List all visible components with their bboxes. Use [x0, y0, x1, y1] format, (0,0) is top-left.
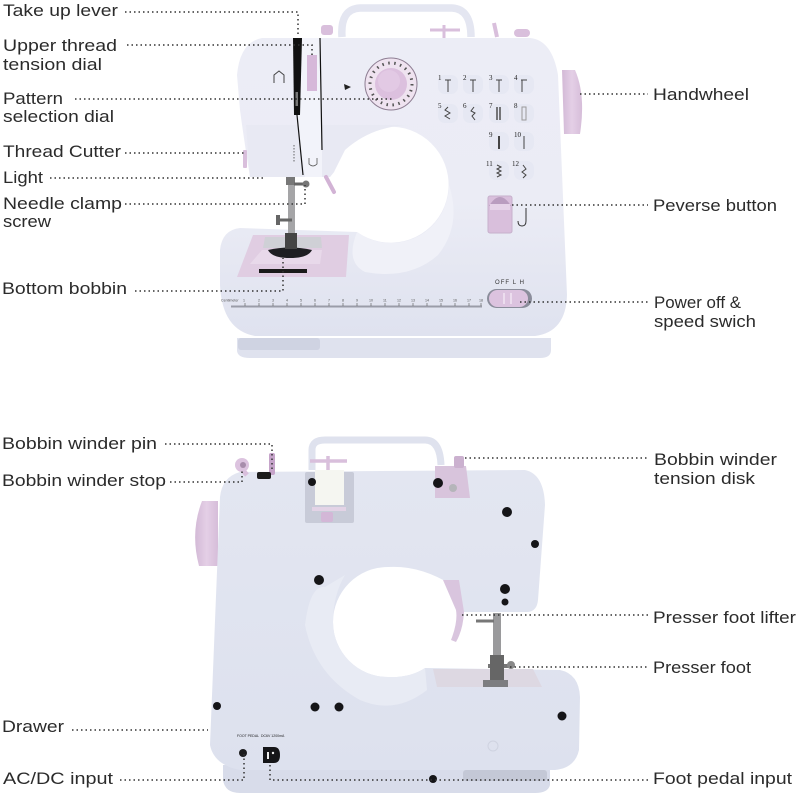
rear body [210, 470, 580, 770]
label: Upper thread tension dial: tension dial [3, 55, 102, 74]
label: Bobbin winder stop: Bobbin winder stop [2, 471, 166, 490]
leader lines [50, 12, 648, 780]
stitch pattern panel [438, 74, 534, 180]
label: Bobbin winder tension disk: tension disk [654, 469, 756, 488]
label: Needle clamp screw: screw [3, 212, 52, 231]
stitch pattern panel: 5 [438, 102, 442, 110]
front view sewing machine [220, 8, 582, 358]
label: Bobbin winder tension disk [654, 450, 777, 488]
ruler: 14 [425, 298, 429, 302]
ruler: 7 [328, 298, 330, 302]
ruler: 5 [300, 298, 302, 302]
stand slot [238, 338, 320, 350]
ruler: Centimeter [221, 298, 239, 302]
rear handle [312, 440, 441, 470]
label: Bobbin winder pin: Bobbin winder pin [2, 434, 157, 453]
machine body [220, 38, 567, 336]
bobbin winder pin [257, 453, 275, 479]
ruler: 9 [356, 298, 358, 302]
power and pedal sockets [237, 734, 498, 763]
label: Power off and speed swich: Power off & [654, 293, 742, 312]
label: Thread Cutter: Thread Cutter [3, 142, 121, 161]
ruler: 13 [411, 298, 415, 302]
ruler: 11 [383, 298, 387, 302]
label: Handwheel: Handwheel [653, 85, 749, 104]
screw holes [213, 478, 566, 783]
presser foot and needle bar [276, 177, 310, 249]
bobbin winder tension disk [435, 456, 470, 498]
label: Presser foot lifter: Presser foot lifter [653, 608, 796, 627]
bobbin plate [237, 235, 349, 277]
stitch pattern panel: 4 [514, 74, 518, 82]
base stand [237, 338, 551, 358]
rear arch crescent [305, 575, 427, 706]
label: Peverse button: Peverse button [653, 196, 777, 215]
reverse button [488, 196, 526, 233]
label: Drawer: Drawer [2, 717, 64, 736]
rear view sewing machine [195, 440, 580, 793]
carrying handle [342, 8, 471, 37]
rear stand slot [463, 770, 547, 781]
label: Pattern selection dial: selection dial [3, 107, 114, 126]
stitch pattern panel: 3 [489, 74, 493, 82]
label: Power off and speed swich [654, 293, 756, 331]
presser foot lifter lever [443, 580, 464, 642]
ruler: 2 [258, 298, 260, 302]
label: AC/DC input: AC/DC input [3, 769, 113, 788]
stitch pattern panel: 1 [438, 74, 442, 82]
stitch pattern panel: 11 [486, 160, 493, 168]
power and pedal sockets: DC6V 1200mA [261, 734, 285, 738]
stitch pattern panel: 10 [514, 131, 522, 139]
power and pedal sockets: FOOT PEDAL [237, 734, 259, 738]
arm shading band [246, 125, 410, 177]
stitch pattern panel: 7 [489, 102, 493, 110]
ruler: 12 [397, 298, 401, 302]
stitch pattern panel: 6 [463, 102, 467, 110]
label: Power off and speed swich: speed swich [654, 312, 756, 331]
ruler: 15 [439, 298, 443, 302]
pattern selection dial [365, 58, 417, 110]
thread guide icon [274, 71, 284, 83]
ruler [221, 298, 483, 306]
label: Needle clamp screw: Needle clamp [3, 194, 122, 213]
stitch pattern panel: 9 [489, 131, 493, 139]
label: Upper thread tension dial [3, 36, 117, 74]
power and speed switch: OFF L H [495, 280, 524, 286]
label: Needle clamp screw [3, 194, 122, 231]
label: Pattern selection dial [3, 89, 114, 126]
arch crescent [352, 185, 454, 274]
label: Bottom bobbin: Bottom bobbin [2, 279, 127, 298]
label: Pattern selection dial: Pattern [3, 89, 63, 108]
label: Take up lever: Take up lever [3, 1, 118, 20]
thread cutter [243, 150, 247, 168]
ruler: 1 [243, 298, 245, 302]
top pins and spool holders [321, 23, 530, 38]
bobbin winder stop [235, 458, 249, 475]
label: Light: Light [3, 168, 43, 187]
pointer arrow [344, 84, 351, 90]
rear base stand [223, 765, 550, 793]
ruler: 10 [369, 298, 373, 302]
ruler: 16 [453, 298, 457, 302]
presser lever [326, 177, 334, 192]
stitch pattern panel: 2 [463, 74, 467, 82]
threading panel [293, 38, 322, 177]
rear needle plate [433, 655, 542, 687]
ruler: 6 [314, 298, 316, 302]
stitch pattern panel: 8 [514, 102, 518, 110]
ruler: 18 [479, 298, 483, 302]
label: Presser foot: Presser foot [653, 658, 751, 677]
stitch pattern panel: 12 [512, 160, 520, 168]
ruler: 17 [467, 298, 471, 302]
ruler: 4 [286, 298, 288, 302]
label: Foot pedal input: Foot pedal input [653, 769, 792, 788]
upper tension dial window [307, 55, 317, 91]
label: Bobbin winder tension disk: Bobbin winder [654, 450, 777, 469]
ruler: 3 [272, 298, 274, 302]
ruler: 8 [342, 298, 344, 302]
label: Upper thread tension dial: Upper thread [3, 36, 117, 55]
spool compartment [305, 456, 354, 523]
rear needle bar and presser foot [476, 613, 515, 669]
power and speed switch [487, 280, 532, 308]
rear handwheel [195, 501, 218, 566]
handwheel [562, 70, 582, 134]
